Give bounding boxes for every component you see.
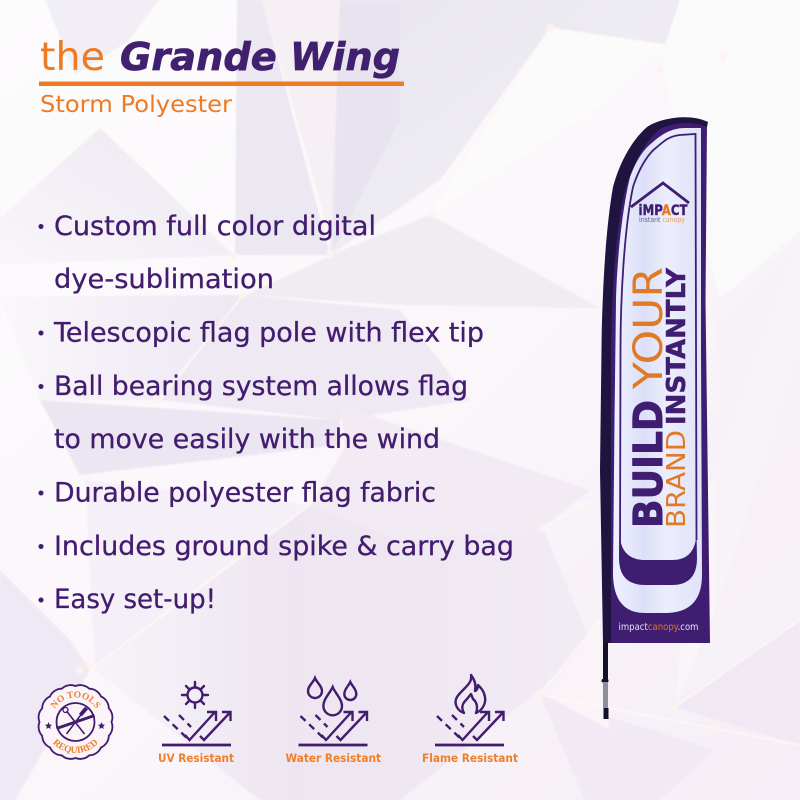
- badge: no tools required: NO TOOLS: [50, 691, 100, 709]
- flag logo: iMPACT: [638, 203, 688, 219]
- title underline: [39, 82, 404, 86]
- label: UV Resistant: [158, 751, 234, 765]
- flag white panel: [613, 128, 702, 613]
- flag lower purple band: [619, 532, 697, 585]
- subtitle: Storm Polyester: [40, 92, 233, 118]
- bullet: pole: Telescopic flag pole with flex tip: [53, 318, 484, 348]
- bullet: setup: Easy set-up!: [54, 584, 216, 615]
- flag slogan: BRAND: [662, 430, 692, 528]
- flag slogan: [626, 267, 692, 528]
- reflection arrows: [162, 712, 231, 745]
- drops: [308, 678, 356, 715]
- title: the: [40, 35, 105, 80]
- icon: flame resistant: [422, 675, 518, 765]
- bullet: bearing: [39, 371, 468, 455]
- bullet: fabric: Durable polyester flag fabric: [54, 478, 436, 508]
- icon: UV resistant: [158, 682, 234, 765]
- label: Flame Resistant: [422, 751, 518, 765]
- flag logo: [631, 183, 689, 224]
- flag inner outline: [620, 134, 696, 555]
- reflection arrows: [298, 712, 368, 745]
- label: Water Resistant: [286, 751, 381, 765]
- title: Grande Wing: [120, 35, 400, 79]
- flag slogan: YOUR: [626, 267, 672, 390]
- bullet: bearing: Ball bearing system allows flag: [54, 371, 468, 402]
- sun: [182, 682, 208, 708]
- bullet: digital: dye-sublimation: [54, 264, 274, 295]
- feature bullet list: [39, 211, 514, 615]
- flag url: impactcanopy.com: [618, 622, 698, 633]
- flag sleeve: [600, 117, 708, 643]
- bullet: spike: Includes ground spike & carry bag: [54, 531, 514, 562]
- flame: [456, 675, 485, 713]
- flag logo: instant canopy: [639, 216, 685, 224]
- flag slogan: BUILD: [626, 400, 672, 528]
- flag slogan: INSTANTLY: [662, 267, 692, 425]
- flag purple body: [604, 120, 710, 643]
- bullet: digital: Custom full color digital: [54, 211, 376, 242]
- badge: no tools required: REQUIRED: [52, 738, 97, 754]
- bullet: bearing: to move easily with the wind: [54, 424, 440, 455]
- reflection arrows: [435, 712, 504, 745]
- icon: water resistant: [286, 678, 381, 765]
- pole: [602, 640, 608, 719]
- badge: no tools required: [38, 684, 114, 760]
- bullet: digital: [39, 211, 376, 295]
- flag product photo: [600, 117, 710, 719]
